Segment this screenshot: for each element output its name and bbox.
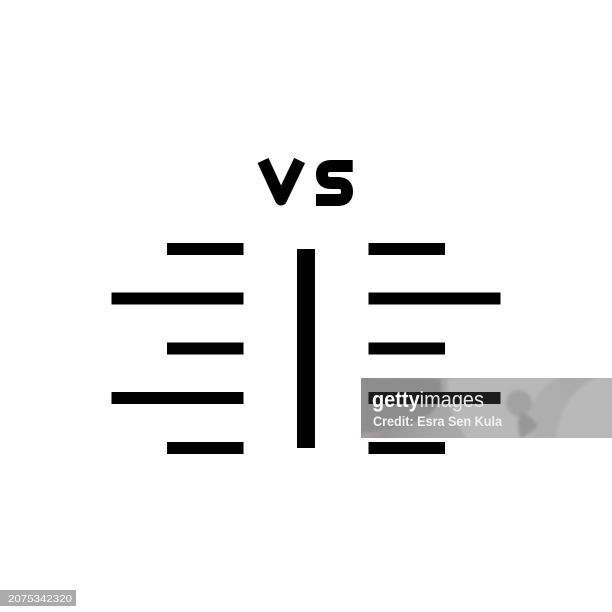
versus comparison infographic	[0, 158, 612, 606]
watermark credit text: Credit: Esra Sen Kula	[373, 413, 502, 429]
banner background	[361, 376, 612, 440]
heading: VS	[263, 160, 353, 200]
watermark banner	[361, 376, 612, 440]
watermark logo text: gettyimages	[372, 387, 484, 412]
image id label	[0, 590, 76, 606]
center divider	[297, 249, 315, 448]
image id label: 2075342320	[8, 593, 72, 605]
bar behind watermark	[368, 392, 500, 404]
letter S	[316, 166, 353, 200]
right column of bars	[368, 243, 500, 454]
left column of bars	[112, 243, 244, 454]
letter V	[263, 160, 300, 200]
